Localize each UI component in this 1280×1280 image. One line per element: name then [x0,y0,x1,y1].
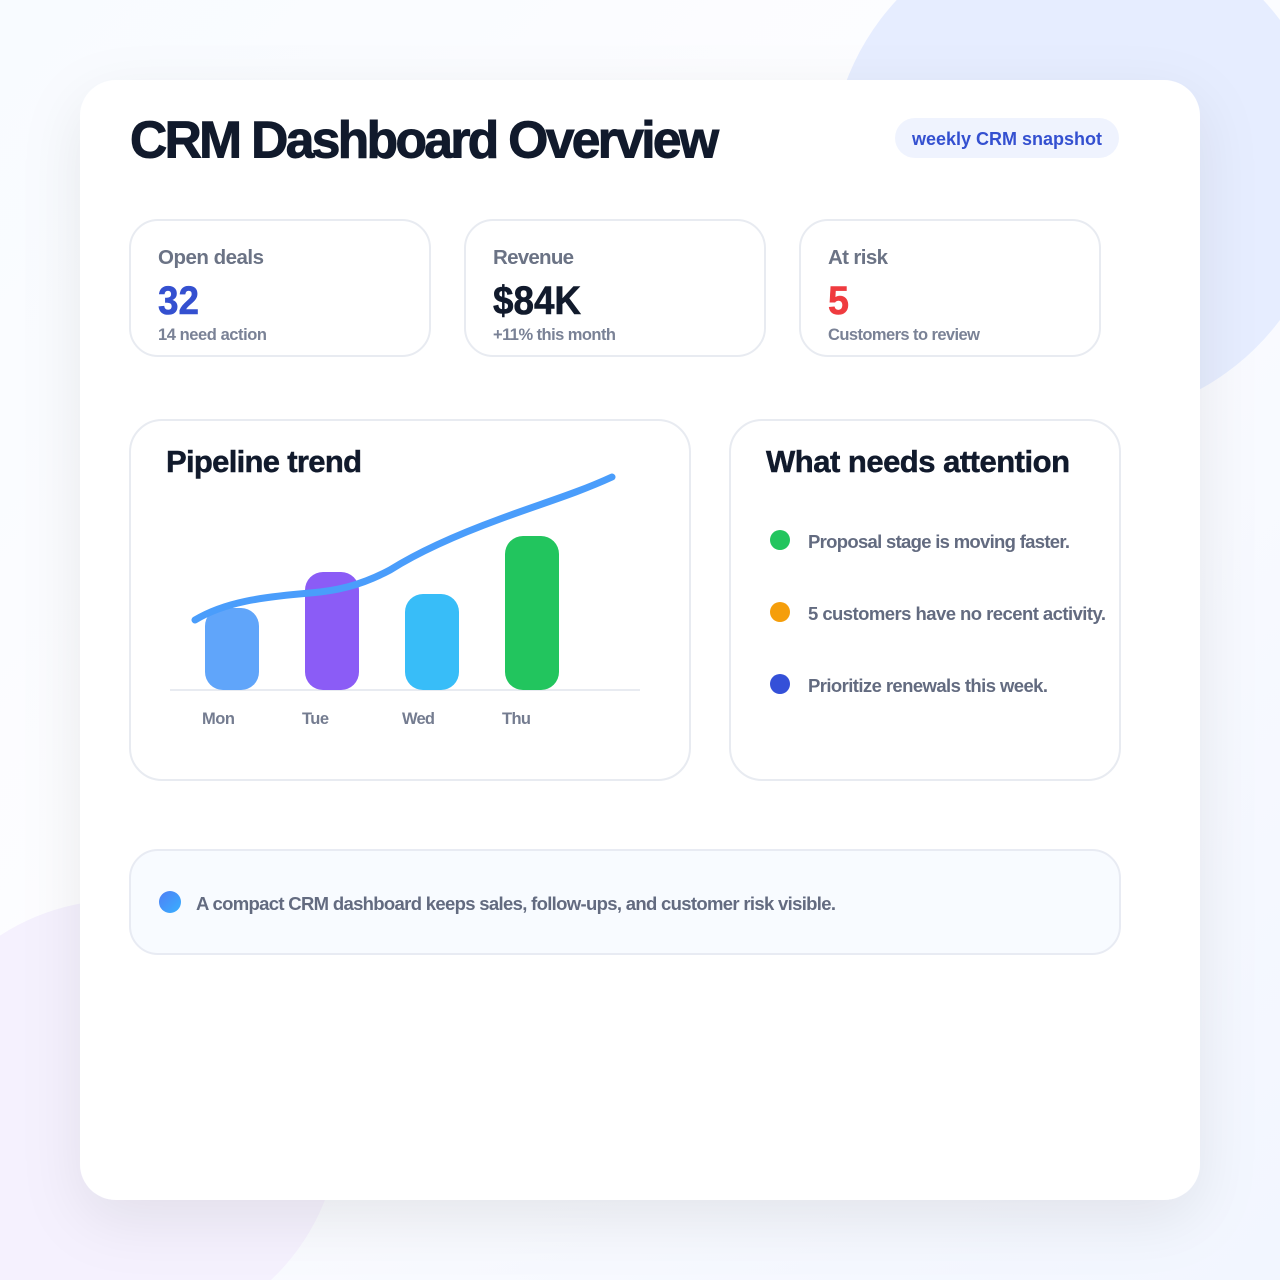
panel: at risk: 5 [828,279,849,323]
panel: revenue [465,220,765,356]
item: renewals: Prioritize renewals this week. [808,675,1048,696]
axis labels [202,710,531,728]
heading: pipeline trend: Pipeline trend [166,444,362,479]
axis labels: Tue [302,710,329,728]
panel: pipeline trend [130,420,690,780]
bar chart [170,536,640,690]
heading: what needs attention: What needs attention [766,444,1070,479]
axis labels: Wed [402,710,435,728]
panel: revenue: +11% this month [493,326,616,344]
summary text: A compact CRM dashboard keeps sales, follow-ups, and customer risk visible. [196,893,836,914]
badge: weekly snapshot [895,118,1119,158]
title: CRM Dashboard Overview [130,110,720,168]
main card [80,80,1200,1200]
trend line [195,477,612,620]
panel: what needs attention [730,420,1120,780]
panel: revenue: $84K [493,279,581,323]
decorative circle: top right [830,0,1280,420]
panel: at risk: At risk [828,246,889,269]
callout: summary [130,850,1120,954]
axis labels: Mon [202,710,235,728]
panel: at risk [800,220,1100,356]
panel: open deals: Open deals [158,246,264,269]
axis labels: Thu [502,710,531,728]
panel: open deals [130,220,430,356]
item: proposal stage: Proposal stage is moving faster. [808,531,1070,552]
icon: summary dot [159,891,181,913]
panel: revenue: Revenue [493,246,574,269]
panel: open deals: 14 need action [158,326,267,344]
panel: open deals: 32 [158,279,199,323]
decorative circle: bottom left [0,900,340,1280]
panel: at risk: Customers to review [828,326,980,344]
item: inactive customers: 5 customers have no recent activity. [808,603,1106,624]
badge: weekly snapshot: weekly CRM snapshot [911,129,1102,149]
